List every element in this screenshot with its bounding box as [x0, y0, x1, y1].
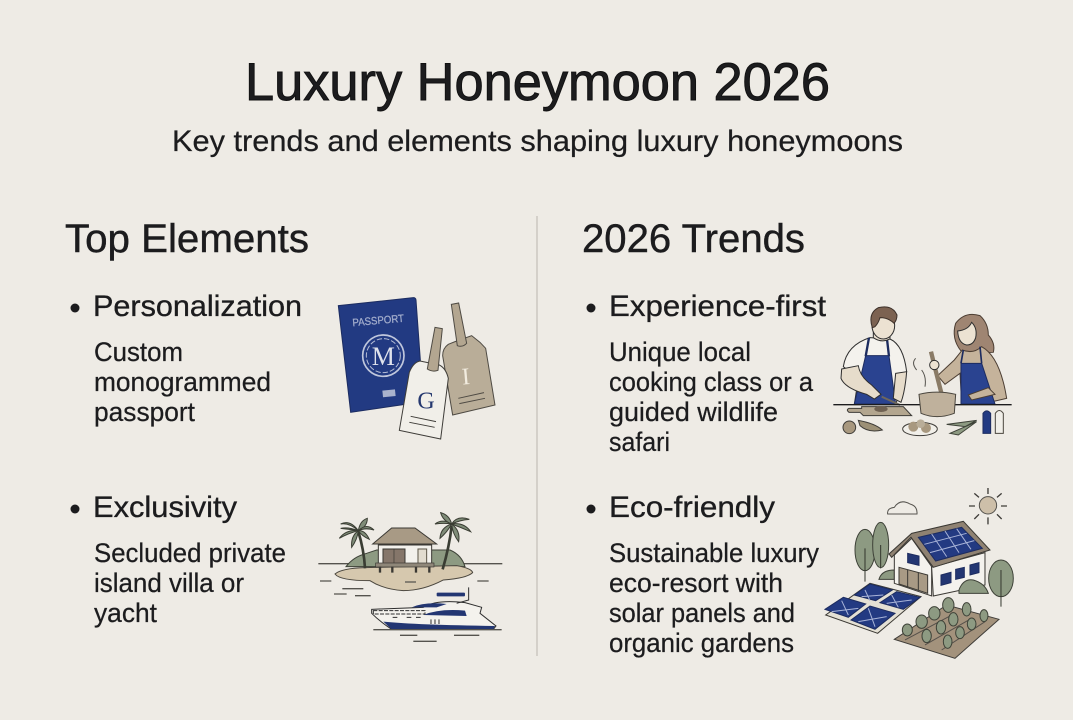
- trees: [855, 522, 1013, 607]
- item: Eco-friendly: solar panels and: [609, 598, 795, 628]
- icon: passport and luggage tags: I: [461, 364, 471, 391]
- icon: passport and luggage tags: [338, 298, 495, 439]
- item: Eco-friendly: organic gardens: [609, 628, 794, 658]
- item: Exclusivity: Exclusivity: [93, 491, 237, 524]
- item: Exclusivity: island villa or: [94, 568, 244, 598]
- item: Experience-first: Experience-first: [609, 290, 827, 323]
- item: Experience-first: guided wildlife: [609, 397, 778, 427]
- counter: [833, 403, 1012, 407]
- subtitle: Key trends and elements shaping luxury honeymoons: [172, 125, 903, 158]
- item: Personalization: Personalization: [93, 290, 302, 323]
- icon: couple cooking together: [833, 307, 1012, 436]
- item: Experience-first: cooking class or a: [609, 367, 814, 397]
- item: Personalization: [70, 290, 302, 427]
- icon: passport and luggage tags: G: [417, 388, 435, 414]
- house: [889, 521, 990, 596]
- item: Experience-first: [586, 290, 827, 457]
- solar panels: [825, 583, 921, 633]
- item: Personalization: passport: [94, 397, 195, 427]
- sun: [969, 488, 1007, 524]
- item: Eco-friendly: Eco-friendly: [609, 491, 775, 524]
- garden: [894, 598, 999, 658]
- item: Eco-friendly: eco-resort with: [609, 568, 783, 598]
- vegetables: [843, 419, 977, 436]
- title: Luxury Honeymoon 2026: [245, 53, 830, 112]
- icon: private island villa and yacht: [318, 513, 502, 641]
- item: Exclusivity: yacht: [94, 598, 157, 628]
- man: [841, 307, 907, 405]
- heading: Top Elements: Top Elements: [65, 217, 309, 261]
- woman: [938, 314, 1007, 404]
- cloud: [888, 502, 917, 514]
- heading: 2026 Trends: 2026 Trends: [582, 217, 805, 261]
- cutting board: [847, 406, 912, 416]
- item: Exclusivity: [70, 491, 286, 628]
- icon: passport and luggage tags: PASSPORT: [352, 313, 405, 329]
- icon: eco resort with solar panels and garden: [825, 488, 1013, 658]
- icon: passport and luggage tags: M: [372, 342, 395, 371]
- item: Experience-first: safari: [609, 427, 670, 457]
- item: Personalization: Custom: [94, 337, 183, 367]
- item: Personalization: monogrammed: [94, 367, 271, 397]
- pot and spoon: [914, 352, 956, 417]
- item: Eco-friendly: [586, 491, 819, 658]
- item: Eco-friendly: Sustainable luxury: [609, 538, 819, 568]
- salt and pepper: [983, 410, 1003, 433]
- item: Experience-first: Unique local: [609, 337, 751, 367]
- item: Exclusivity: Secluded private: [94, 538, 286, 568]
